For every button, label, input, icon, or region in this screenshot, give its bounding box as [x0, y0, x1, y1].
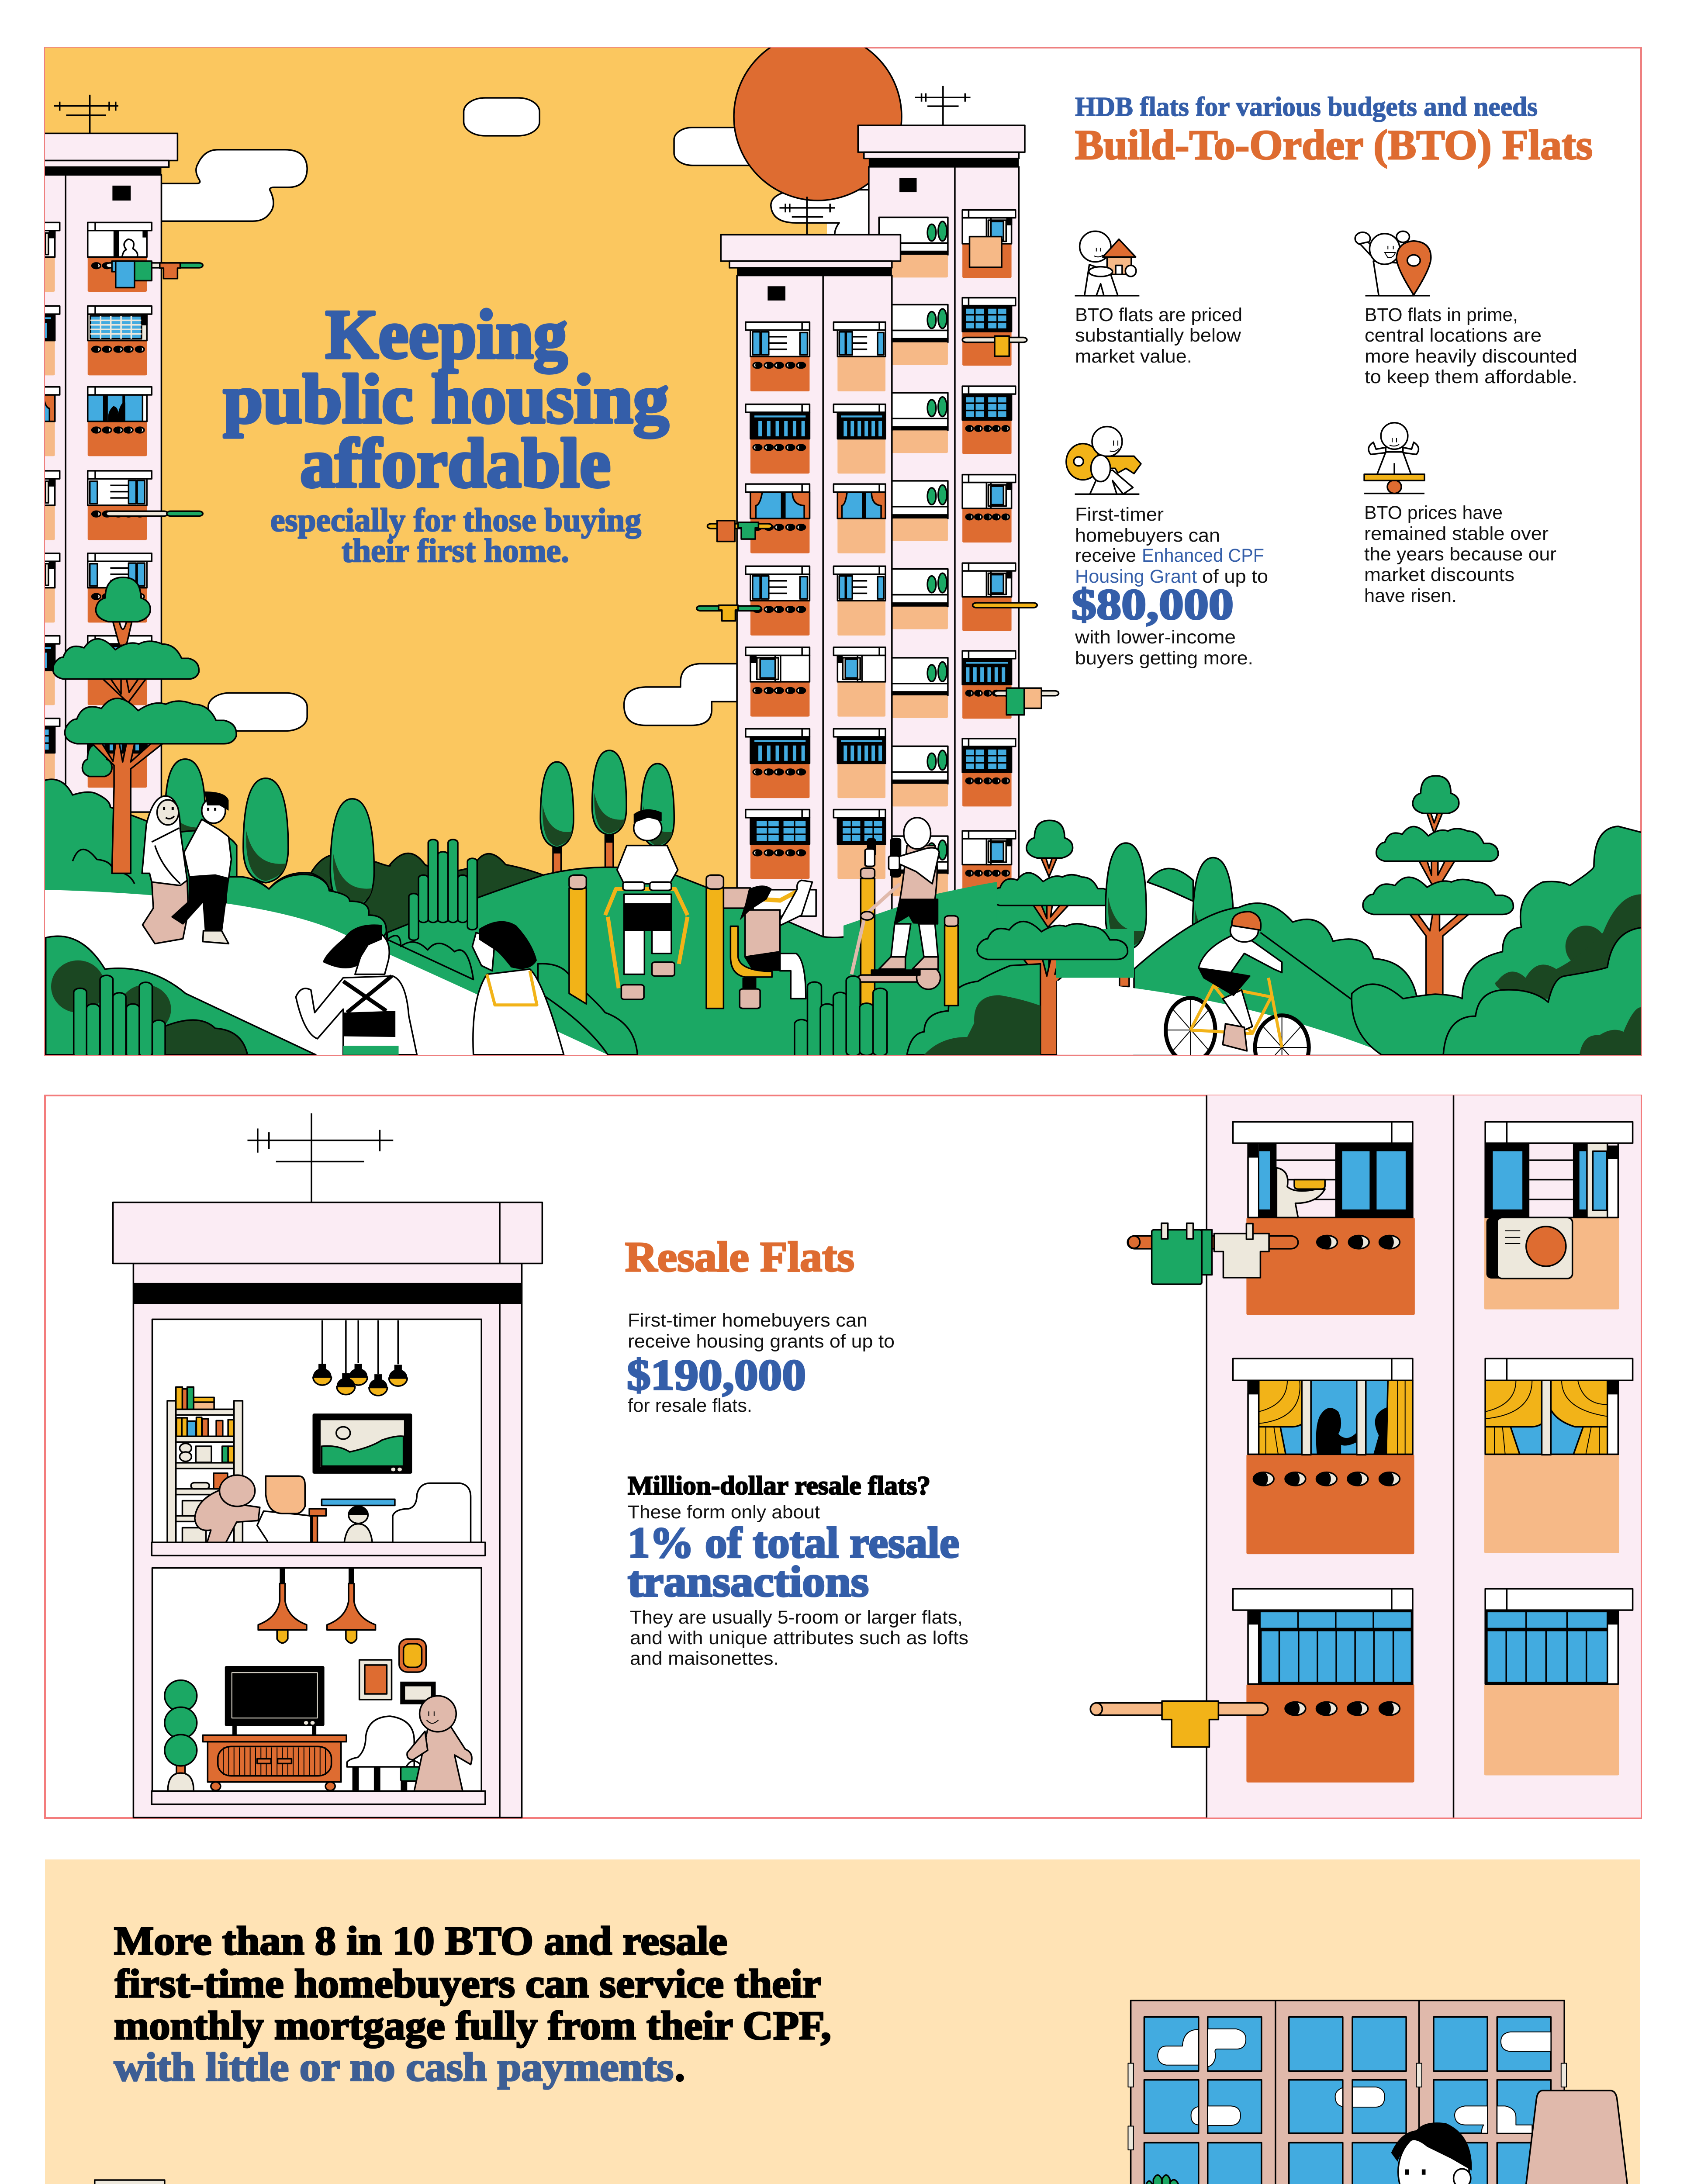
heading: more than 8 in 10: [114, 1918, 831, 2089]
title: keeping public housing affordable: [223, 295, 669, 569]
antenna: [247, 1113, 393, 1203]
illustration: housing estate and park: [0, 33, 1645, 1138]
laundry: [697, 521, 772, 621]
title: keeping public housing affordable: especially for those buying: [270, 502, 641, 539]
layered tree: left: [53, 577, 236, 873]
room: upper floor: [152, 1319, 485, 1555]
floor lamp: [1525, 2091, 1629, 2184]
text: enhanced CPF housing grant: Enhanced CPF: [1142, 545, 1264, 566]
statistic: 1% of total resale transactions: 1% of total resale: [628, 1518, 959, 1567]
orange column row 1: [1233, 1122, 1415, 1315]
curtain row peach: [1484, 1358, 1633, 1553]
heading: HDB flats: HDB flats for various budgets and needs: [1075, 92, 1538, 122]
text: stable prices: remained stable over: [1364, 523, 1549, 544]
person: woman with black top: [296, 924, 417, 1055]
person: woman in hijab: [142, 796, 188, 943]
right hill with slope: [844, 882, 1462, 1055]
building: centre tower: [697, 197, 901, 947]
heading: more than 8 in 10: More than 8 in 10 BTO and resale: [114, 1918, 727, 1963]
text: prime central locations: more heavily discounted: [1365, 346, 1577, 367]
text: housing grants: [628, 1310, 895, 1352]
bars: foreground hedge: [795, 982, 847, 1061]
cropped peach column: [0, 222, 60, 788]
blue grille row orange: [1233, 1589, 1414, 1783]
vent holes: [1253, 1236, 1400, 1715]
balcony column with plants: [879, 217, 948, 896]
text: 5-room or larger flats: They are usually 5-room or larger flats,: [630, 1607, 963, 1628]
sun: [734, 33, 902, 200]
heading: resale flats: Resale Flats: [625, 1234, 854, 1281]
title: keeping public housing affordable: Keeping: [325, 295, 567, 373]
orange window column: [746, 322, 809, 879]
topiary plant: [165, 1680, 197, 1791]
text: enhanced CPF housing grant: [1075, 504, 1268, 587]
laundry poles: [962, 336, 1059, 715]
text: lower-income buyers: with lower-income: [1075, 627, 1236, 648]
heading: more than 8 in 10: with little or no cash payments: [114, 2045, 674, 2089]
text: housing grants: receive housing grants of up to: [628, 1331, 895, 1352]
clouds in panes: [1158, 2029, 1551, 2133]
armchair: [393, 1483, 471, 1542]
window column: [88, 222, 152, 788]
text: 5-room or larger flats: and with unique attributes such as lofts: [630, 1628, 968, 1648]
icon: figure holding house: [1075, 231, 1139, 296]
number: $80,000: $80,000: [1072, 580, 1234, 629]
footpath: [45, 890, 608, 1055]
poplars: right hill: [1106, 843, 1234, 986]
air-con row: [1484, 1122, 1633, 1310]
building: rear tower: [858, 86, 1059, 947]
peach window column: [833, 322, 885, 879]
text: stable prices: market discounts: [1364, 564, 1514, 585]
person: man walking: [172, 791, 232, 943]
text: these form only about: These form only about: [628, 1502, 820, 1523]
antenna: [54, 95, 118, 133]
text: below market value: market value.: [1075, 346, 1192, 367]
person with handbag: [401, 1696, 472, 1791]
antenna: [779, 197, 835, 235]
back hedge: [307, 854, 543, 940]
text: enhanced CPF housing grant: First-timer: [1075, 504, 1164, 525]
pendant lamps: [313, 1320, 407, 1396]
panel: affordable mortgage home scene: [45, 1859, 1640, 2184]
heading: more than 8 in 10: .: [675, 2045, 685, 2089]
curtain row orange: [1233, 1358, 1414, 1554]
person: woman in white dress: [472, 921, 564, 1055]
building facade: close-up: [1090, 1095, 1641, 1818]
cactus hedge: [409, 840, 477, 940]
title: keeping public housing affordable: public housing: [223, 360, 669, 438]
text: for resale flats: for resale flats.: [628, 1395, 752, 1416]
panel: Build-To-Order hero scene: [44, 47, 1642, 1056]
text: 5-room or larger flats: [630, 1607, 968, 1669]
clouds: [161, 98, 915, 731]
person: mother with roast chicken: [1289, 2122, 1527, 2184]
text: enhanced CPF housing grant: Housing Grant: [1075, 566, 1197, 587]
text: stable prices: the years because our: [1364, 544, 1556, 565]
laundry: [106, 261, 203, 516]
text: enhanced CPF housing grant: receive: [1075, 545, 1136, 566]
text: prime central locations: BTO flats in prime,: [1365, 304, 1518, 325]
icon: figure carrying key: [1066, 427, 1141, 494]
centre hill: [387, 867, 1049, 1138]
text: below market value: BTO flats are priced: [1075, 304, 1242, 325]
person: child petting dog: [195, 1475, 311, 1542]
text: prime central locations: to keep them affordable.: [1365, 366, 1577, 387]
icon: figure with location pin: [1355, 231, 1431, 296]
panel frame: [45, 48, 1641, 1055]
building cutaway interior: [113, 1113, 542, 1818]
text: 5-room or larger flats: and maisonettes.: [630, 1648, 779, 1669]
person: woman on pull-up machine: [723, 880, 816, 1009]
laundry: green and cream shirts: [1127, 1223, 1298, 1284]
text: below market value: [1075, 304, 1242, 367]
statistic: 1% of total resale transactions: transactions: [628, 1557, 869, 1606]
text: prime central locations: [1365, 304, 1577, 387]
laundry: yellow shirt: [1090, 1701, 1268, 1747]
antenna: [915, 86, 971, 125]
heading: more than 8 in 10: first-time homebuyers can service their: [115, 1961, 821, 2006]
building: left tower: [0, 95, 203, 812]
left hedge and poplars: [32, 759, 387, 964]
stool, bust and shelf: [309, 1499, 395, 1542]
text: housing grants: First-timer homebuyers can: [628, 1310, 868, 1331]
panel: resale flats: [45, 1095, 1641, 1818]
text: lower-income buyers: buyers getting more.: [1075, 648, 1253, 669]
title: keeping public housing affordable: affordable: [300, 424, 611, 502]
blue grille row peach: [1484, 1589, 1633, 1776]
heading: more than 8 in 10: monthly mortgage fully from their CPF,: [114, 2003, 831, 2048]
window column: [962, 210, 1016, 899]
gym equipment and man: [569, 809, 723, 1009]
person: man on elliptical: [846, 818, 958, 1056]
cyclist on bicycle: [1166, 912, 1309, 1079]
layered tree: middle: [992, 820, 1112, 1055]
bookshelf: [167, 1387, 242, 1542]
number: $190,000: $190,000: [627, 1351, 806, 1399]
wall frames: [360, 1639, 436, 1704]
text: stable prices: [1364, 502, 1556, 606]
text: stable prices: have risen.: [1364, 585, 1457, 606]
heading: Build-To-Order (BTO) Flats: Build-To-Order (BTO) Flats: [1075, 121, 1593, 168]
poplar trees: centre hill: [540, 750, 674, 884]
layered tree: right: [1363, 776, 1513, 997]
ceiling lamps: [258, 1568, 376, 1643]
wall background: [45, 1859, 1640, 2184]
text: enhanced CPF housing grant: of up to: [1202, 566, 1268, 587]
wall frames: [95, 2180, 250, 2184]
text: below market value: substantially below: [1075, 325, 1241, 346]
window with sky: [1120, 2001, 1568, 2184]
statistic: 1% of total resale transactions: [628, 1518, 959, 1606]
icon: figure balancing on seesaw: [1364, 423, 1424, 494]
subheading: million-dollar resale flats: Million-dollar resale flats?: [628, 1471, 930, 1500]
text: stable prices: BTO prices have: [1364, 502, 1503, 523]
text: lower-income buyers: [1075, 627, 1253, 669]
room: lower floor: [152, 1568, 485, 1804]
white chair: [347, 1716, 414, 1791]
text: enhanced CPF housing grant: homebuyers can: [1075, 525, 1220, 546]
panel frame: [45, 1095, 1641, 1818]
hinges: [1128, 2063, 1566, 2150]
sky background: [45, 48, 827, 899]
title: keeping public housing affordable: their first home.: [342, 532, 569, 569]
television and console: [203, 1666, 346, 1790]
wall picture: [313, 1413, 412, 1474]
text: prime central locations: central locations are: [1365, 325, 1542, 346]
right hedge: [1352, 826, 1645, 1055]
path-side bushes: [46, 936, 637, 1059]
